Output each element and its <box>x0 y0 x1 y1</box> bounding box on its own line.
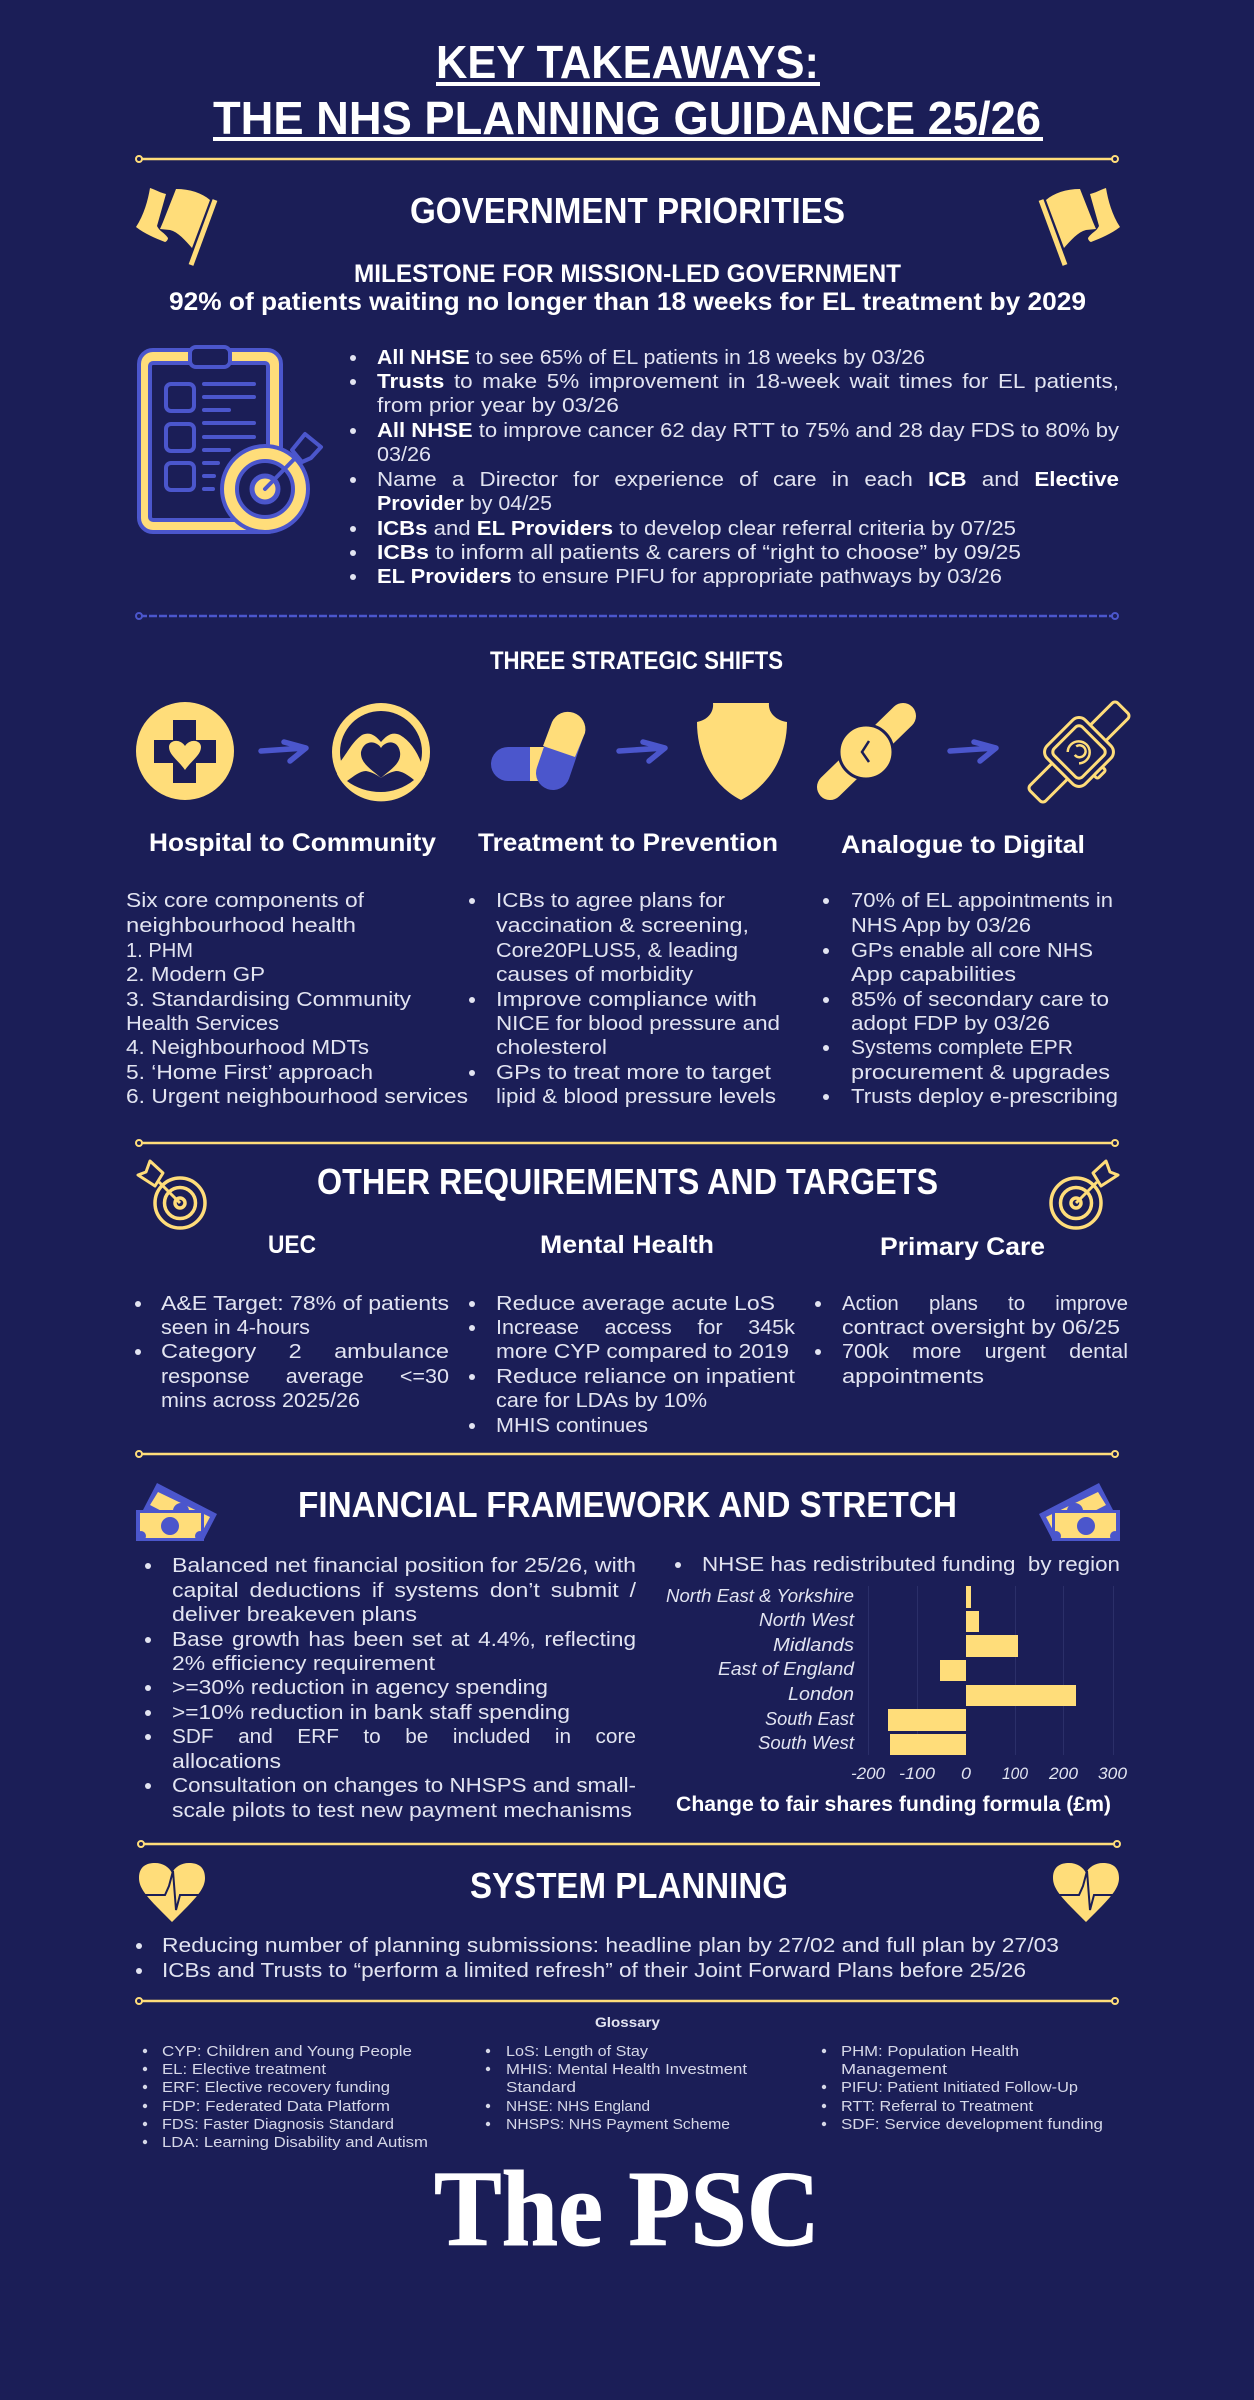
glossary column 1: CYP: Children and Young People <box>162 2043 412 2060</box>
bar chart: change to fair shares funding formula: 100 <box>1002 1764 1028 1783</box>
text block: treatment to prevention: Improve compliance with <box>496 989 757 1011</box>
icon: hospital cross <box>136 702 234 800</box>
heading: other requirements and targets: OTHER REQUIREMENTS AND TARGETS <box>317 1161 938 1202</box>
text block: analogue to digital <box>823 890 1118 1108</box>
heading: mental health: Mental Health <box>540 1231 714 1259</box>
text block: hospital to community: 5. ‘Home First’ approach <box>126 1062 373 1084</box>
glossary column 1: EL: Elective treatment <box>162 2061 327 2078</box>
heading: hospital to community: Hospital to Community <box>149 829 436 857</box>
text block: UEC: mins across 2025/26 <box>161 1390 360 1412</box>
text block: hospital to community: neighbourhood health <box>126 915 356 937</box>
bar chart: change to fair shares funding formula: 0 <box>961 1764 972 1783</box>
bullet list: government priorities: from prior year by 03/26 <box>377 395 619 417</box>
icon: target right <box>1051 1161 1118 1228</box>
heading: primary care: Primary Care <box>880 1233 1045 1261</box>
text block: UEC: A&E Target: 78% of patients <box>161 1293 449 1315</box>
glossary column 3: RTT: Referral to Treatment <box>841 2098 1034 2115</box>
bullet list: financial framework: Consultation on changes to NHSPS and small- <box>172 1775 636 1797</box>
heading: treatment to prevention: Treatment to Prevention <box>478 829 778 857</box>
text block: analogue to digital: 70% of EL appointments in <box>851 890 1113 912</box>
bullet list: government priorities: Trusts to make 5% improvement in 18-week wait times for EL patients, <box>377 371 1119 393</box>
icon: flag right <box>1041 188 1120 265</box>
bar chart: change to fair shares funding formula: -200 <box>851 1764 886 1783</box>
text block: hospital to community: 3. Standardising Community <box>126 989 411 1011</box>
icon: shield <box>697 703 787 800</box>
text block: analogue to digital: adopt FDP by 03/26 <box>851 1013 1050 1035</box>
icon: smart watch <box>1016 689 1145 818</box>
text block: mental health: Reduce average acute LoS <box>496 1293 775 1315</box>
text block: primary care: 700k more urgent dental <box>842 1341 1128 1363</box>
text block: UEC <box>135 1293 449 1412</box>
bar chart: change to fair shares funding formula: -100 <box>899 1764 936 1783</box>
text block: mental health: more CYP compared to 2019 <box>496 1341 789 1363</box>
text block: primary care: contract oversight by 06/25 <box>842 1317 1120 1339</box>
title: THE NHS PLANNING GUIDANCE 25/26 <box>213 92 1041 144</box>
title <box>213 36 1043 144</box>
bar chart: change to fair shares funding formula: Midlands <box>773 1635 854 1655</box>
bullet list: financial framework: deliver breakeven plans <box>172 1604 417 1626</box>
bullet list: government priorities: All NHSE to improve cancer 62 day RTT to 75% and 28 day FDS to 80% by <box>377 420 1119 442</box>
text block: primary care: Action plans to improve <box>842 1293 1128 1315</box>
text block: analogue to digital: GPs enable all core NHS <box>851 940 1093 962</box>
heading: three strategic shifts: THREE STRATEGIC SHIFTS <box>490 647 783 675</box>
text block: treatment to prevention: causes of morbidity <box>496 964 693 986</box>
text block: UEC: seen in 4-hours <box>161 1317 310 1339</box>
text block: analogue to digital: NHS App by 03/26 <box>851 915 1031 937</box>
glossary column 3: Management <box>841 2061 948 2078</box>
bar chart: change to fair shares funding formula: 200 <box>1048 1764 1079 1783</box>
bar chart: change to fair shares funding formula: Change to fair shares funding formula (£m) <box>676 1793 1111 1816</box>
bullet list: system planning: ICBs and Trusts to “perform a limited refresh” of their Joint Forward Plans before 25/26 <box>162 1960 1026 1982</box>
icon: target left <box>138 1161 205 1228</box>
glossary column 3: SDF: Service development funding <box>841 2116 1103 2133</box>
icon: heart right <box>1053 1863 1119 1922</box>
glossary column 2: NHSE: NHS England <box>506 2098 650 2115</box>
bullet list: government priorities: 03/26 <box>377 444 431 466</box>
bullet list: financial framework: capital deductions if systems don’t submit / <box>172 1580 637 1602</box>
bar chart: change to fair shares funding formula: London <box>788 1684 854 1704</box>
text block: UEC: Category 2 ambulance <box>161 1341 449 1363</box>
bullet list: government priorities: ICBs to inform all patients & carers of “right to choose” by 09/25 <box>377 542 1021 564</box>
arrow: analogue to digital <box>950 742 996 761</box>
arrow: hospital to community <box>261 742 306 761</box>
glossary column 1: FDP: Federated Data Platform <box>162 2098 390 2115</box>
bullet list: financial framework: Balanced net financial position for 25/26, with <box>172 1555 636 1577</box>
glossary column 1: ERF: Elective recovery funding <box>162 2079 390 2096</box>
glossary column 1: LDA: Learning Disability and Autism <box>162 2134 428 2151</box>
milestone text: 92% of patients waiting no longer than 18 weeks for EL treatment by 2029 <box>169 288 1086 316</box>
text block: treatment to prevention: NICE for blood pressure and <box>496 1013 780 1035</box>
text block: mental health: MHIS continues <box>496 1415 648 1437</box>
icon: heart left <box>139 1863 205 1922</box>
bar chart: change to fair shares funding formula: South East <box>765 1709 855 1729</box>
text block: primary care <box>815 1293 1128 1388</box>
bullet list: financial framework: Base growth has been set at 4.4%, reflecting <box>172 1629 636 1651</box>
text block: treatment to prevention: Core20PLUS5, & leading <box>496 940 738 962</box>
text block: primary care: appointments <box>842 1366 984 1388</box>
icon: pills <box>491 712 585 781</box>
bullet list: government priorities: Provider by 04/25 <box>377 493 552 515</box>
arrow: treatment to prevention <box>619 742 665 761</box>
text block: treatment to prevention <box>469 890 780 1108</box>
icon: money right <box>1039 1483 1120 1541</box>
bar chart: change to fair shares funding formula: East of England <box>718 1659 855 1679</box>
heading: government priorities: GOVERNMENT PRIORITIES <box>410 190 845 231</box>
bullet list: system planning: Reducing number of planning submissions: headline plan by 27/02 and full plan by 27/03 <box>162 1935 1059 1957</box>
text block: hospital to community: 1. PHM <box>126 940 193 962</box>
bullet list: financial framework <box>145 1555 637 1822</box>
bar chart: change to fair shares funding formula <box>666 1586 1128 1816</box>
bullet list: financial framework: SDF and ERF to be included in core <box>172 1726 636 1748</box>
icon: analogue watch <box>830 716 903 787</box>
text block: hospital to community <box>126 890 468 1108</box>
icon: money left <box>136 1483 217 1541</box>
icon: flag left <box>136 188 215 265</box>
bullet: regional funding: NHSE has redistributed funding by region <box>702 1554 1120 1576</box>
glossary column 3: PIFU: Patient Initiated Follow-Up <box>841 2079 1078 2096</box>
bullet list: financial framework: allocations <box>172 1751 281 1773</box>
bar chart: change to fair shares funding formula: North West <box>759 1610 855 1630</box>
icon: hands heart <box>332 703 430 801</box>
bar chart: change to fair shares funding formula: North East & Yorkshire <box>666 1586 854 1606</box>
text block: mental health: care for LDAs by 10% <box>496 1390 707 1412</box>
bullet list: system planning <box>136 1935 1059 1982</box>
title: KEY TAKEAWAYS: <box>436 36 819 88</box>
heading: UEC: UEC <box>268 1231 316 1259</box>
text block: treatment to prevention: ICBs to agree plans for <box>496 890 725 912</box>
glossary column 3: PHM: Population Health <box>841 2043 1019 2060</box>
glossary column 3 <box>822 2043 1103 2133</box>
bar chart: change to fair shares funding formula: South West <box>758 1733 855 1753</box>
text block: hospital to community: Six core components of <box>126 890 364 912</box>
text block: UEC: response average <=30 <box>161 1366 449 1388</box>
bullet list: government priorities: ICBs and EL Providers to develop clear referral criteria by 07/25 <box>377 518 1016 540</box>
text block: treatment to prevention: GPs to treat more to target <box>496 1062 771 1084</box>
glossary column 2 <box>486 2043 748 2133</box>
bullet list: financial framework: scale pilots to test new payment mechanisms <box>172 1800 632 1822</box>
text block: hospital to community: 6. Urgent neighbourhood services <box>126 1086 468 1108</box>
text block: hospital to community: 4. Neighbourhood MDTs <box>126 1037 369 1059</box>
bullet list: financial framework: >=30% reduction in agency spending <box>172 1677 548 1699</box>
text block: hospital to community: Health Services <box>126 1013 279 1035</box>
bullet list: government priorities: Name a Director for experience of care in each ICB and Elective <box>377 469 1119 491</box>
text block: treatment to prevention: vaccination & screening, <box>496 915 749 937</box>
logo: The PSC: The PSC <box>434 2150 820 2269</box>
bullet list: government priorities: All NHSE to see 65% of EL patients in 18 weeks by 03/26 <box>377 347 925 369</box>
text block: analogue to digital: Systems complete EPR <box>851 1037 1073 1059</box>
heading: financial framework and stretch: FINANCIAL FRAMEWORK AND STRETCH <box>298 1484 957 1525</box>
milestone text <box>169 260 1086 316</box>
text block: hospital to community: 2. Modern GP <box>126 964 265 986</box>
icon: clipboard with target <box>139 347 321 532</box>
milestone text: MILESTONE FOR MISSION-LED GOVERNMENT <box>354 260 901 288</box>
text block: analogue to digital: Trusts deploy e-prescribing <box>851 1086 1118 1108</box>
glossary column 1: FDS: Faster Diagnosis Standard <box>162 2116 394 2133</box>
glossary column 2: NHSPS: NHS Payment Scheme <box>506 2116 730 2133</box>
text block: analogue to digital: App capabilities <box>851 964 1016 986</box>
text block: mental health <box>469 1293 796 1437</box>
glossary column 1 <box>143 2043 428 2151</box>
text block: mental health: Increase access for 345k <box>496 1317 796 1339</box>
bullet list: government priorities <box>350 347 1119 588</box>
bullet list: government priorities: EL Providers to ensure PIFU for appropriate pathways by 03/26 <box>377 566 1002 588</box>
heading: analogue to digital: Analogue to Digital <box>841 831 1085 859</box>
heading: system planning: SYSTEM PLANNING <box>470 1865 788 1906</box>
heading: glossary: Glossary <box>595 2014 660 2030</box>
text block: treatment to prevention: lipid & blood pressure levels <box>496 1086 776 1108</box>
bar chart: change to fair shares funding formula: 300 <box>1098 1764 1128 1783</box>
bullet list: financial framework: 2% efficiency requirement <box>172 1653 436 1675</box>
text block: analogue to digital: 85% of secondary care to <box>851 989 1109 1011</box>
glossary column 2: LoS: Length of Stay <box>506 2043 649 2060</box>
glossary column 2: Standard <box>506 2079 576 2096</box>
text block: treatment to prevention: cholesterol <box>496 1037 607 1059</box>
text block: analogue to digital: procurement & upgrades <box>851 1062 1110 1084</box>
bullet list: financial framework: >=10% reduction in bank staff spending <box>172 1702 570 1724</box>
glossary column 2: MHIS: Mental Health Investment <box>506 2061 748 2078</box>
text block: mental health: Reduce reliance on inpatient <box>496 1366 796 1388</box>
